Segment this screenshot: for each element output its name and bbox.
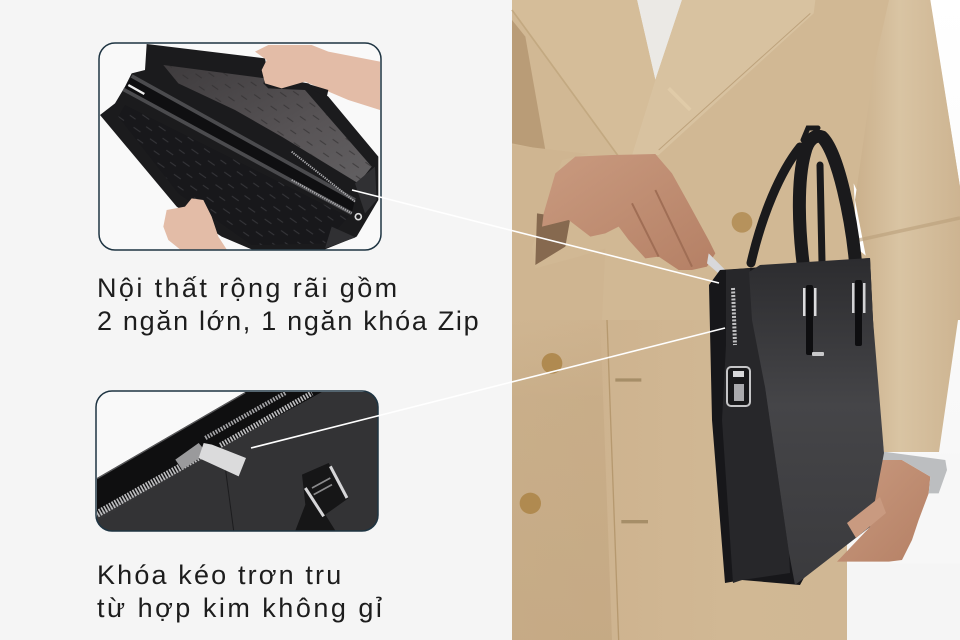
thumb over bag — [847, 497, 886, 538]
front panel — [749, 258, 884, 585]
right lapel — [632, 0, 815, 155]
bag — [709, 128, 884, 585]
buckle — [295, 463, 349, 531]
lower hand — [837, 460, 930, 562]
band highlight — [97, 393, 245, 479]
white edge glint — [128, 85, 144, 94]
thumb — [849, 502, 884, 537]
zipper teeth — [292, 152, 355, 213]
top coat button — [732, 212, 752, 233]
slider — [175, 443, 202, 470]
middle compartment — [123, 77, 355, 213]
shirt — [637, 0, 682, 80]
handles — [751, 128, 856, 278]
gap between arm and body — [854, 183, 867, 257]
back panel — [709, 258, 880, 585]
hand — [542, 154, 715, 270]
upper hand — [255, 45, 380, 110]
zipper teeth — [733, 288, 735, 345]
bag shell — [100, 44, 378, 249]
caption: zipper — [97, 560, 384, 623]
lock — [727, 367, 750, 406]
callout line: interior — [352, 190, 719, 283]
lower buttonholes — [615, 380, 648, 522]
coat lower half — [512, 320, 960, 640]
coat top half — [512, 0, 960, 320]
gusset — [722, 268, 790, 583]
right sleeve — [855, 0, 960, 452]
cuff — [512, 145, 605, 320]
handle tab — [310, 84, 328, 96]
bag surface — [97, 392, 322, 521]
lower right background — [847, 563, 960, 640]
caption: interior: Nội thất rộng rãi gồm — [97, 273, 400, 303]
caption: zipper: Khóa kéo trơn tru — [97, 560, 343, 590]
caption: zipper: từ hợp kim không gỉ — [97, 593, 384, 623]
corner gussets — [355, 167, 377, 213]
front lining — [118, 105, 348, 245]
stitching — [225, 468, 234, 531]
back lining — [163, 65, 372, 183]
panel frame: zipper photo — [96, 391, 378, 531]
watch — [882, 452, 947, 493]
zipper rails — [123, 76, 355, 213]
strap clips — [803, 280, 866, 356]
black band — [97, 392, 322, 515]
callout line: zipper — [251, 328, 725, 448]
panel frame: interior photo — [99, 43, 381, 250]
sleeve fold — [859, 218, 960, 240]
zipper teeth upper — [205, 393, 285, 438]
left panel shade — [512, 320, 612, 640]
caption: interior: 2 ngăn lớn, 1 ngăn khóa Zip — [97, 306, 480, 336]
panel: interior photo — [99, 43, 381, 250]
zipper pull — [199, 443, 246, 476]
front seam — [607, 320, 619, 640]
zipper end metal — [355, 214, 361, 220]
lower fabric — [97, 392, 378, 531]
zipper pull — [707, 253, 725, 275]
caption: interior — [97, 273, 480, 336]
lower hand — [163, 198, 227, 249]
coat inner shadow — [512, 20, 545, 150]
cuff lining — [535, 213, 570, 265]
zipper teeth lower — [97, 453, 205, 514]
buttonhole — [669, 88, 690, 110]
buttons — [520, 353, 562, 514]
panel: zipper photo — [96, 391, 378, 531]
left lapel — [512, 0, 655, 157]
finger creases — [632, 190, 692, 267]
panel: model photo — [512, 0, 960, 640]
